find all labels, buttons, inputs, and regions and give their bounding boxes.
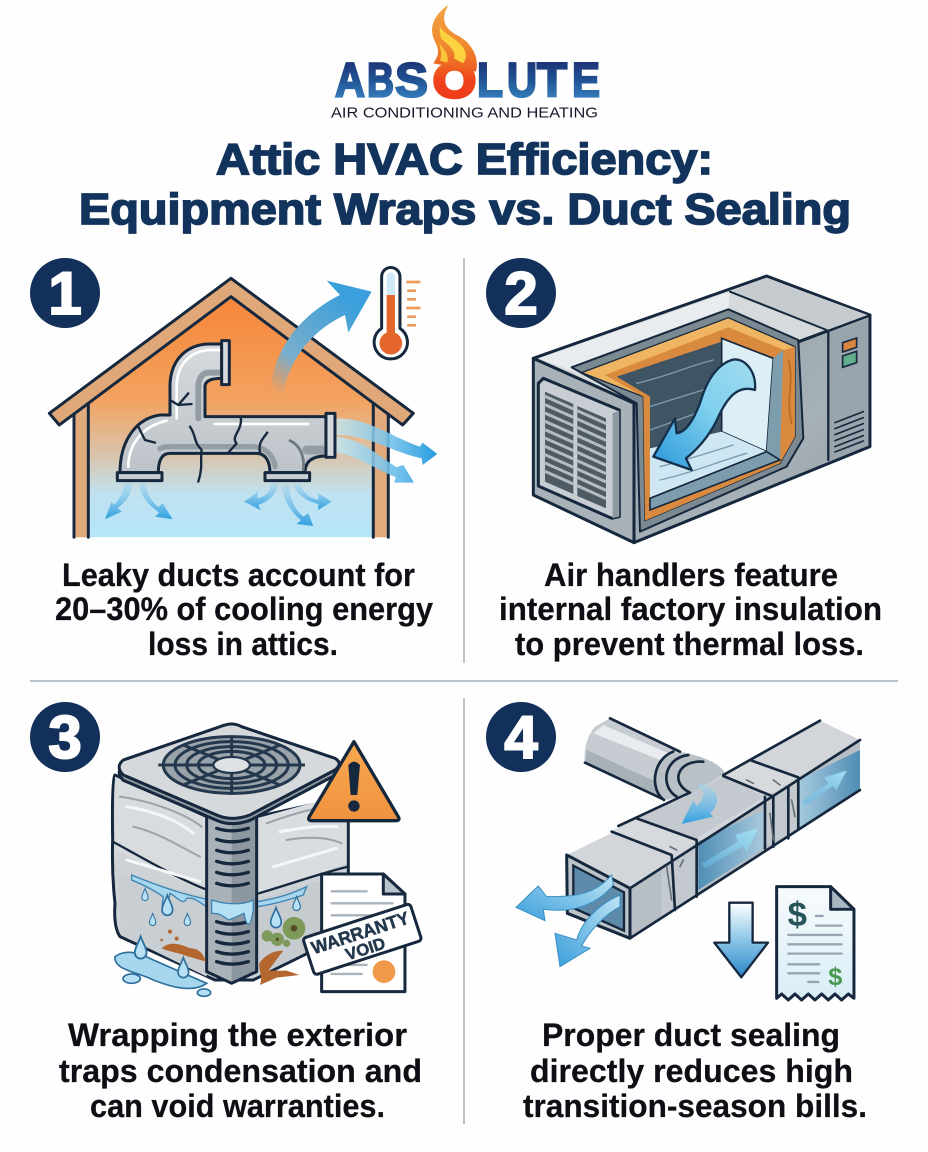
warranty void stamp: VOID	[343, 934, 388, 964]
logo wordmark: T	[537, 54, 567, 108]
round duct	[585, 718, 725, 800]
caption 1	[55, 557, 433, 662]
logo wordmark: U	[507, 54, 537, 108]
front grille	[538, 378, 619, 518]
air flow arrow	[653, 359, 755, 470]
water band and drips	[132, 875, 307, 921]
caption 3: can void warranties.	[90, 1088, 385, 1124]
illustration: air handler cutaway	[533, 276, 870, 543]
caption 3: traps condensation and	[59, 1053, 422, 1089]
logo wordmark: O	[433, 55, 476, 108]
caption 4	[523, 1017, 867, 1124]
lid with fan	[119, 724, 339, 824]
air escaping upward arrow	[270, 281, 372, 393]
water drops	[135, 889, 300, 978]
badge 2	[486, 258, 556, 328]
caption 2: internal factory insulation	[499, 591, 882, 627]
energy bill	[777, 887, 854, 1000]
logo tagline: AIR CONDITIONING AND HEATING	[331, 104, 598, 122]
logo wordmark: B	[367, 54, 394, 108]
caption 4: directly reduces high	[530, 1053, 853, 1089]
caption 3	[59, 1017, 422, 1124]
rust	[160, 930, 299, 985]
caption 2: Air handlers feature	[544, 557, 838, 593]
illustration: leaky duct in attic	[49, 267, 437, 537]
caption 4: transition-season bills.	[523, 1088, 867, 1124]
outgoing air arrows	[516, 875, 620, 967]
energy bill: $	[788, 896, 807, 934]
energy bill: $	[828, 963, 842, 991]
leaky pipe	[117, 341, 335, 482]
badge 2: 2	[504, 260, 538, 327]
logo wordmark	[335, 54, 600, 108]
thermometer	[374, 267, 419, 359]
junction curved arrow	[682, 783, 717, 824]
panel 2: air handler	[486, 258, 882, 662]
down arrow: lower bills	[714, 903, 768, 977]
mold	[262, 917, 305, 947]
air escaping right arrows	[337, 418, 437, 483]
badge 3: 3	[48, 704, 82, 771]
caption 3: Wrapping the exterior	[68, 1017, 407, 1053]
vent slots	[835, 412, 863, 452]
warning triangle	[309, 742, 399, 821]
cutaway insulation layers	[572, 309, 803, 532]
badge 4: 4	[504, 704, 538, 771]
title: Equipment Wraps vs. Duct Sealing	[79, 185, 851, 234]
panel 1: leaky ducts	[30, 258, 437, 662]
slat column	[207, 817, 257, 983]
house	[49, 278, 413, 537]
logo wordmark: E	[572, 54, 600, 108]
caption 1: 20–30% of cooling energy	[55, 591, 433, 627]
warranty void stamp: WARRANTY	[309, 908, 412, 958]
rectangular trunk duct	[567, 721, 860, 938]
cracks	[138, 393, 267, 482]
title: Attic HVAC Efficiency:	[216, 135, 713, 184]
caption 4: Proper duct sealing	[542, 1017, 840, 1053]
caption 1: Leaky ducts account for	[62, 557, 415, 593]
badge 1	[30, 258, 100, 328]
caption 2	[499, 557, 882, 662]
water puddle	[115, 952, 211, 996]
warranty document	[303, 874, 422, 992]
back wall	[617, 342, 722, 460]
insulation lining	[637, 338, 783, 510]
panel 3: wrapped condenser	[30, 702, 422, 1124]
duct airflow arrows	[702, 771, 847, 868]
badge 1: 1	[48, 260, 82, 327]
warranty void stamp	[303, 904, 422, 975]
logo wordmark: L	[477, 54, 503, 108]
badge 3	[30, 702, 100, 772]
logo flame	[432, 5, 477, 72]
indicator lights	[843, 338, 857, 367]
logo	[331, 5, 600, 122]
caption 2: to prevent thermal loss.	[515, 626, 864, 662]
panel 4: sealed ducts	[486, 702, 867, 1124]
illustration: wrapped outdoor unit	[112, 724, 422, 996]
caption 1: loss in attics.	[148, 626, 338, 662]
title	[79, 135, 851, 234]
cabinet	[533, 276, 870, 543]
badge 4	[486, 702, 556, 772]
illustration: sealed duct junction	[516, 718, 860, 1000]
air escaping downward arrows	[105, 483, 332, 526]
logo wordmark: S	[395, 54, 428, 108]
logo wordmark: A	[335, 54, 365, 108]
wrapped body	[112, 775, 348, 980]
